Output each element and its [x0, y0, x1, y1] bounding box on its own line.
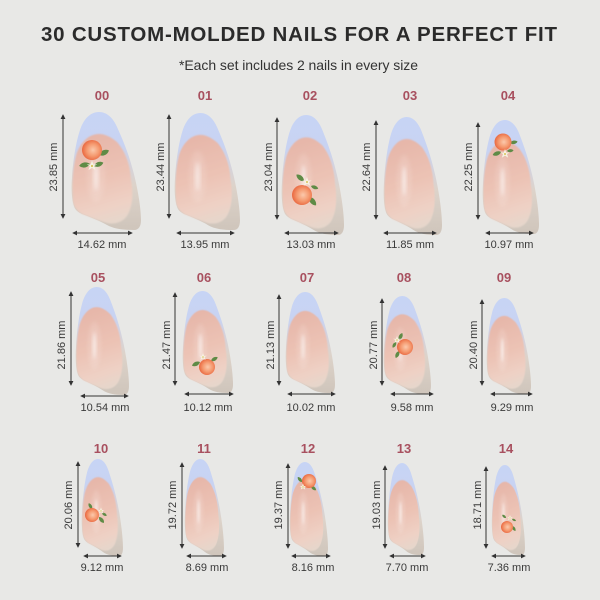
decal: peach: [501, 514, 517, 533]
nail size 04: 10.97 mm: [485, 239, 533, 251]
decal: peach: [191, 353, 219, 375]
nail size 05: 10.54 mm: [81, 402, 129, 414]
nail size 09: 20.40 mm: [468, 321, 480, 369]
nail size 02: [263, 88, 344, 251]
nail size 10: 20.06 mm: [63, 481, 75, 529]
nail size 04: [463, 88, 539, 251]
nail size 01: 13.95 mm: [181, 239, 229, 251]
nail size 08: [368, 270, 433, 414]
nail size 10: 10: [94, 441, 108, 456]
nail size 12: 8.16 mm: [292, 562, 334, 574]
nail size 13: 13: [397, 441, 411, 456]
nail size 06: 10.12 mm: [184, 402, 232, 414]
nail size 02: 02: [303, 88, 317, 103]
nail size 07: 21.13 mm: [265, 321, 277, 369]
decal: peach: [391, 332, 413, 359]
nail size 07: 07: [300, 270, 314, 285]
nail size 10: 9.12 mm: [81, 562, 123, 574]
nail size 14: [472, 441, 530, 574]
subtitle: *Each set includes 2 nails in every size: [179, 57, 418, 73]
nail size 12: 19.37 mm: [273, 481, 285, 529]
title: 30 CUSTOM-MOLDED NAILS FOR A PERFECT FIT: [41, 23, 557, 46]
nail size 01: [155, 88, 240, 251]
nail size 14: 7.36 mm: [488, 562, 530, 574]
nail size 08: 20.77 mm: [368, 321, 380, 369]
nail size 02: 23.04 mm: [263, 143, 275, 191]
nail size 08: 08: [397, 270, 411, 285]
decal: peach: [79, 140, 110, 170]
nail size 01: 23.44 mm: [155, 143, 167, 191]
nail size 12: [273, 441, 334, 574]
nail size 14: 18.71 mm: [472, 481, 484, 529]
nail size 04: 22.25 mm: [463, 143, 475, 191]
decal: peach: [85, 503, 107, 524]
nail size 13: 7.70 mm: [386, 562, 428, 574]
nail size 02: 13.03 mm: [287, 239, 335, 251]
nail size 09: 9.29 mm: [491, 402, 533, 414]
nail size 06: [161, 270, 233, 414]
nail size 05: [56, 270, 129, 414]
nail size 08: 9.58 mm: [391, 402, 433, 414]
nail size 09: [468, 270, 533, 414]
nail size 13: [371, 441, 428, 574]
nail size 07: 10.02 mm: [287, 402, 335, 414]
nail size 01: 01: [198, 88, 212, 103]
nail size 03: 03: [403, 88, 417, 103]
decal: peach: [292, 173, 319, 207]
nail size 06: 06: [197, 270, 211, 285]
nail size 11: 8.69 mm: [186, 562, 228, 574]
nail size 03: 22.64 mm: [361, 143, 373, 191]
nail size 03: [361, 88, 442, 251]
nail size 13: 19.03 mm: [371, 481, 383, 529]
nail size 05: 21.86 mm: [56, 321, 68, 369]
nail size 11: 11: [197, 441, 211, 456]
nail size 10: [63, 441, 123, 574]
nail size 11: [167, 441, 228, 574]
nail size 04: 04: [501, 88, 516, 103]
nail size 06: 21.47 mm: [161, 321, 173, 369]
nail size 09: 09: [497, 270, 511, 285]
nail size 00: 14.62 mm: [78, 239, 126, 251]
nail size 00: [48, 88, 141, 251]
nail size 05: 05: [91, 270, 105, 285]
decal: peach: [492, 134, 518, 158]
nail size 14: 14: [499, 441, 514, 456]
nail size 07: [265, 270, 335, 414]
decal: peach: [297, 474, 317, 491]
nail size 00: 00: [95, 88, 109, 103]
nail size 00: 23.85 mm: [48, 143, 60, 191]
nail size 12: 12: [301, 441, 315, 456]
nail size 03: 11.85 mm: [386, 239, 434, 251]
nail size 11: 19.72 mm: [167, 481, 179, 529]
